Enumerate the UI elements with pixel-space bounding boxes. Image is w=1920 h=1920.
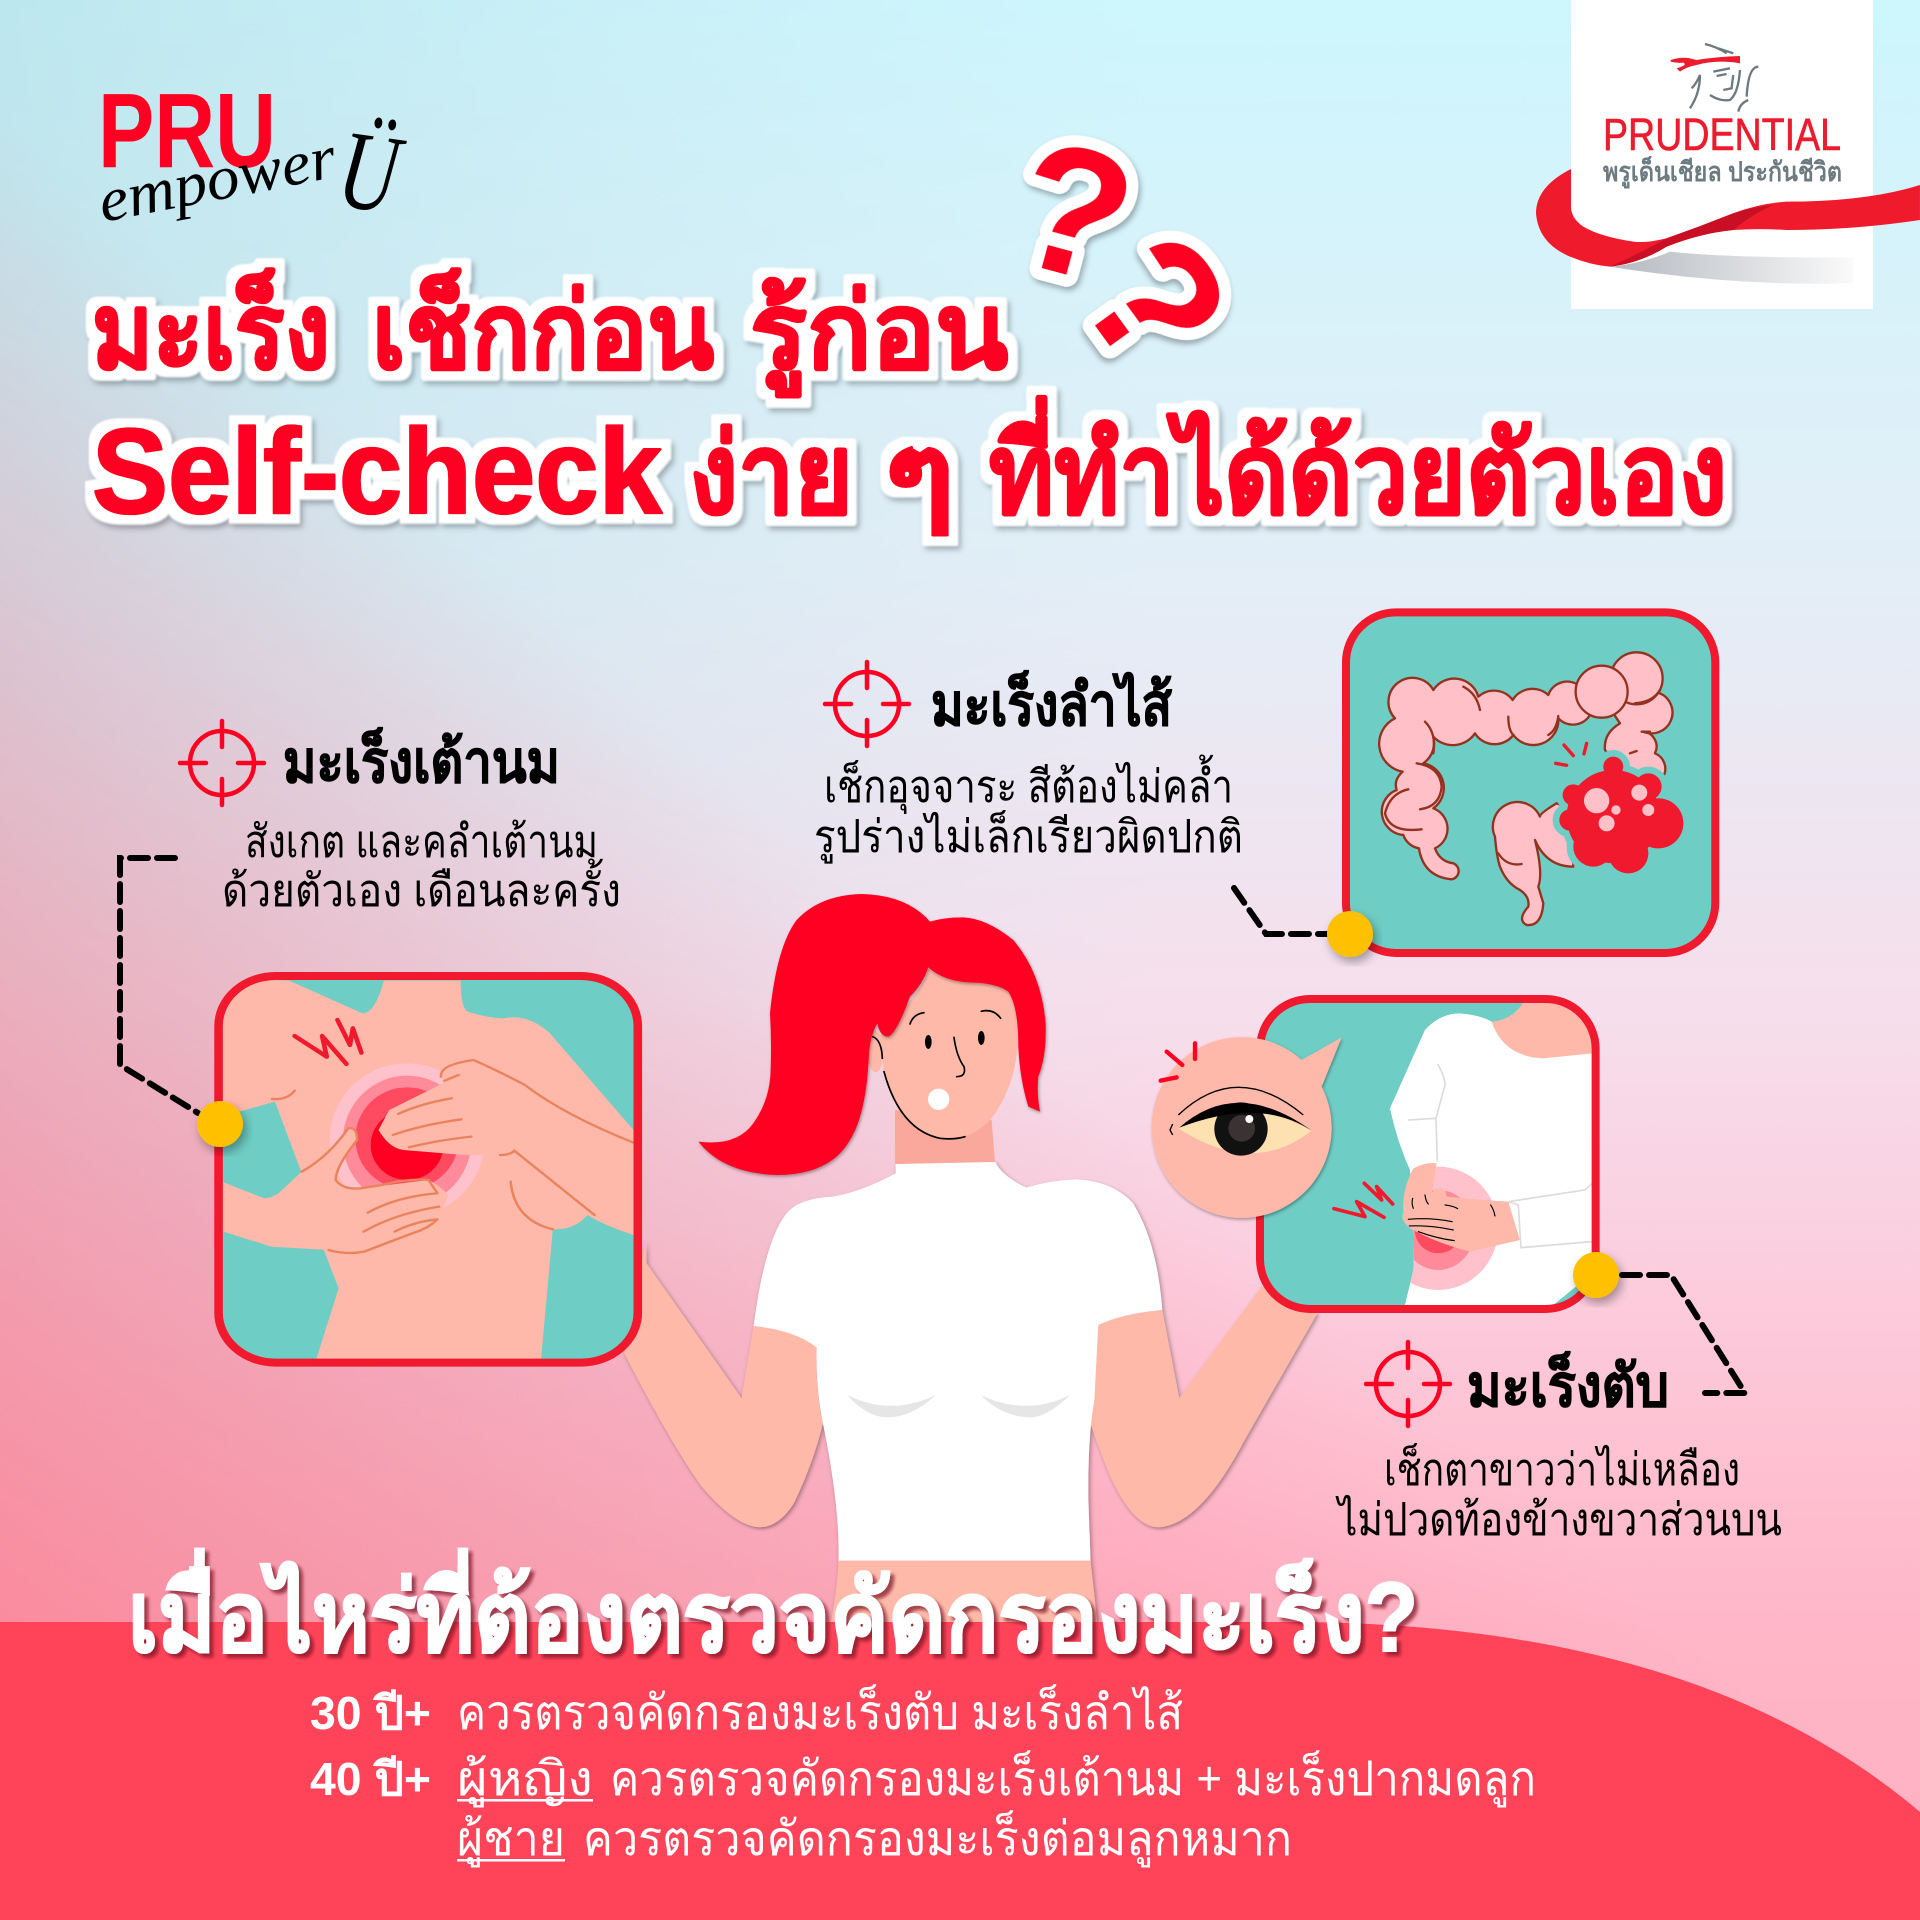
text: liver check: เช็กตาขาวว่าไม่เหลือง [1384, 1443, 1740, 1495]
screening: age 40: ควรตรวจคัดกรองมะเร็งต่อมลูกหมาก [583, 1810, 1292, 1868]
arms and torso [624, 1162, 1317, 1640]
head [698, 894, 1046, 1175]
screening: age 40: ควรตรวจคัดกรองมะเร็งเต้านม + มะเร็งปากมดลูก [610, 1750, 1536, 1808]
text: colon check [814, 754, 1243, 864]
title line 1: รู้ก่อน [750, 273, 1008, 398]
title line 2: ๆ [884, 412, 955, 537]
connector: colon [1234, 888, 1373, 957]
screening: age 40: ผู้ชาย [457, 1813, 565, 1868]
title line 2: Self-check [92, 403, 663, 539]
question mark 2: ? [1040, 197, 1271, 407]
text: colon check: เช็กอุจจาระ สีต้องไม่คล้ำ [824, 754, 1233, 814]
crosshair icon: colon [825, 662, 909, 746]
text: breast check [222, 816, 621, 916]
bottom banner [0, 1622, 1920, 1920]
title line 1 [92, 268, 1008, 398]
PRU empower U logo: empower [93, 123, 342, 236]
title line 2: ง่าย [689, 412, 853, 537]
screening: age 40: ผู้หญิง [457, 1753, 593, 1808]
PRU empower U logo: PRU [98, 72, 276, 190]
text: breast check: ด้วยตัวเอง เดือนละครั้ง [222, 858, 621, 916]
screening: age 40: 40 ปี+ [310, 1753, 431, 1805]
title line 2: ที่ทำได้ด้วยตัวเอง [989, 395, 1727, 537]
screening: age 30: 30 ปี+ [310, 1687, 431, 1739]
Prudential logo [1536, 0, 1920, 309]
text: liver check [1335, 1443, 1782, 1545]
panel: colon illustration [1346, 612, 1715, 953]
title line 1: มะเร็ง [92, 268, 330, 391]
eye bubble [1152, 1037, 1342, 1218]
heading: breast cancer: มะเร็งเต้านม [283, 727, 560, 795]
question mark 1: ? [994, 99, 1154, 324]
panel: breast illustration [219, 976, 638, 1363]
Prudential logo: พรูเด็นเชียล ประกันชีวิต [1603, 154, 1842, 189]
text: colon check: รูปร่างไม่เล็กเรียวผิดปกติ [814, 810, 1243, 864]
logo head [1671, 44, 1758, 112]
banner heading: เมื่อไหร่ที่ต้องตรวจคัดกรองมะเร็ง? [128, 1548, 1418, 1672]
woman figure [624, 894, 1317, 1640]
heading: colon cancer: มะเร็งลำไส้ [931, 670, 1173, 738]
tumor [1559, 757, 1683, 873]
connector: liver [1573, 1252, 1745, 1393]
crosshair icon: liver [1366, 1342, 1450, 1426]
text: breast check: สังเกต และคลำเต้านม [245, 816, 598, 867]
screening: age 40 [310, 1750, 1536, 1868]
heading: liver cancer: มะเร็งตับ [1467, 1351, 1669, 1419]
title line 1: เช็กก่อน [372, 268, 714, 391]
PRU empower U logo: Ü [332, 107, 411, 238]
panel: liver illustration [1152, 999, 1597, 1309]
screening: age 30: ควรตรวจคัดกรองมะเร็งตับ มะเร็งลำไส้ [457, 1684, 1183, 1740]
crosshair icon: breast [180, 721, 264, 805]
title line 2 [92, 395, 1727, 539]
PRU empower U logo [93, 72, 411, 238]
connector: breast [120, 858, 243, 1147]
colon [1379, 652, 1673, 925]
Prudential logo: PRUDENTIAL [1603, 109, 1841, 160]
text: liver check: ไม่ปวดท้องข้างขวาส่วนบน [1335, 1494, 1782, 1545]
